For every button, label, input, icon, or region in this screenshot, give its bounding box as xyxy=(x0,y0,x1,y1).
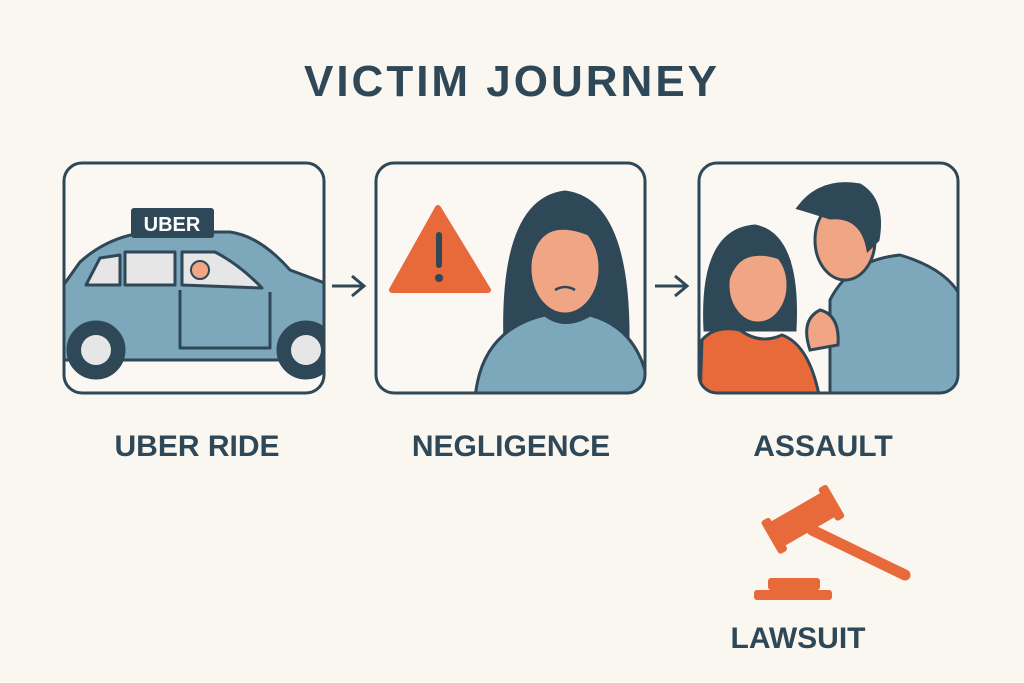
label: uber ride: UBER RIDE xyxy=(114,430,280,463)
label: uber sign xyxy=(131,208,214,238)
icon: man xyxy=(798,184,962,400)
icon: warning xyxy=(392,208,488,290)
icon: sad woman xyxy=(475,192,650,400)
label: negligence: NEGLIGENCE xyxy=(412,430,610,463)
panel: negligence xyxy=(376,163,650,400)
icon: gavel xyxy=(754,484,905,600)
label: lawsuit: LAWSUIT xyxy=(730,622,866,655)
panel: uber ride xyxy=(60,163,334,393)
panel: assault xyxy=(699,163,962,400)
arrow 2 xyxy=(655,276,687,296)
arrow 1 xyxy=(332,276,364,296)
icon: car xyxy=(60,232,334,378)
label: assault: ASSAULT xyxy=(753,430,893,463)
title: VICTIM JOURNEY xyxy=(304,57,720,106)
icon: woman xyxy=(700,226,838,400)
label: uber sign: UBER xyxy=(144,214,201,236)
